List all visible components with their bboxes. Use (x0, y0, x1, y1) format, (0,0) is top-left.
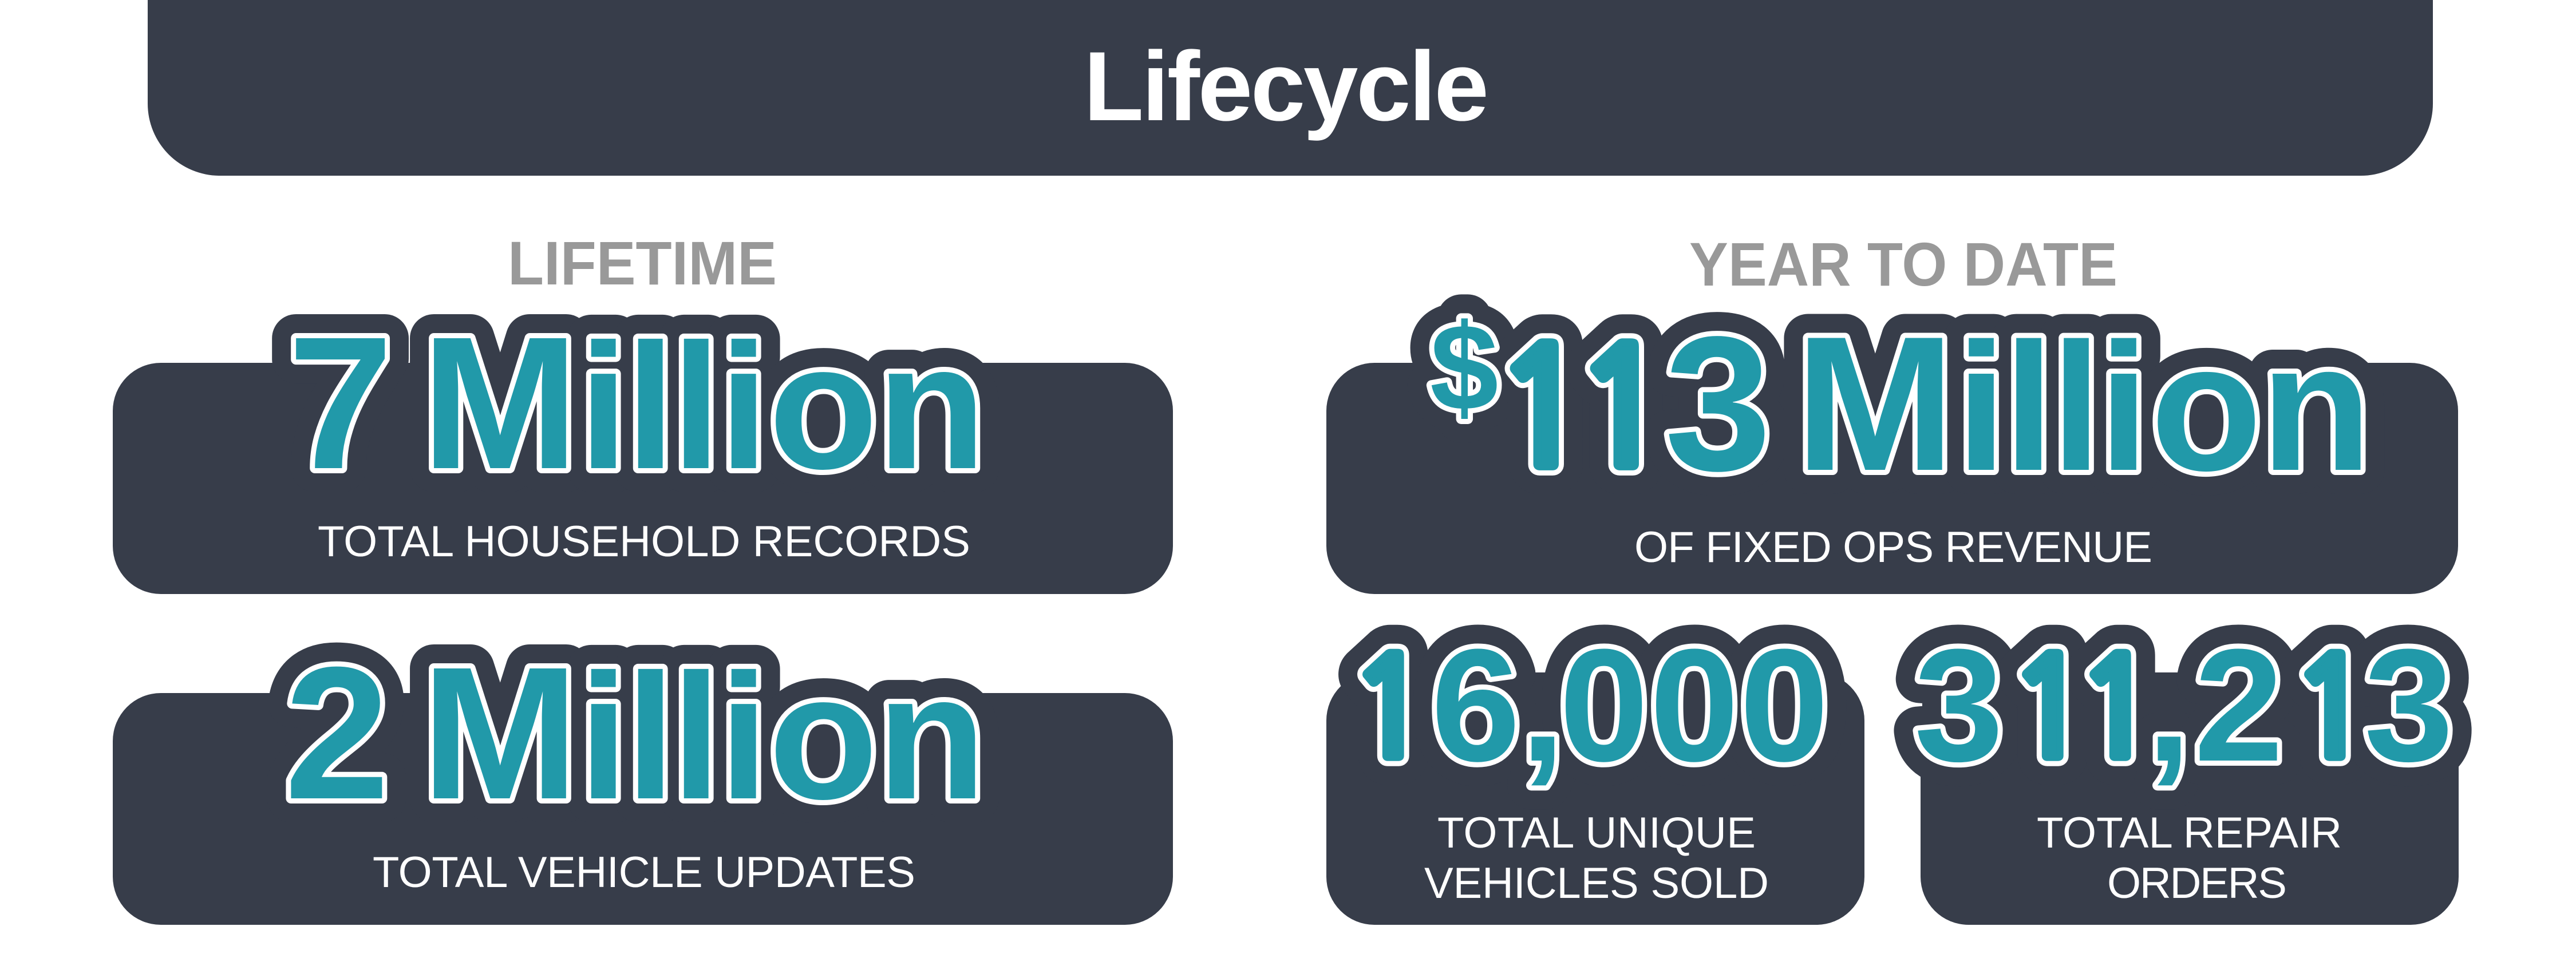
stat: 311,213: ,2 (2147, 616, 2283, 795)
stat: 311,213: 3 (2364, 616, 2453, 795)
stat: 113 million: illion (1956, 306, 2372, 509)
panel: total household records: 7 M (288, 297, 579, 508)
caption line 2: VEHICLES SOLD (1424, 859, 1769, 908)
panel: repair orders: 111 (2008, 641, 2374, 778)
stat: 311,213: 3 (1914, 616, 2004, 795)
panel: repair orders: 3 (2364, 616, 2453, 795)
stat: 2 million: 2 M (285, 627, 579, 838)
panel: total vehicle updates: 2 M (285, 627, 579, 838)
stat: 7 million: illion (579, 307, 986, 506)
caption line 2: ORDERS (2107, 859, 2287, 908)
title: Lifecycle (1084, 31, 1489, 141)
caption: TOTAL REPAIR (2037, 809, 2342, 857)
panel: fixed ops revenue: $ (1430, 298, 1499, 436)
panel: unique vehicles sold (1326, 616, 1864, 925)
panel: repair orders: 1 (2290, 641, 2374, 778)
panel: fixed ops revenue (1326, 296, 2458, 594)
stat: 2 million: illion (579, 638, 986, 837)
heading: lifetime: LIFETIME (508, 228, 777, 298)
panel: fixed ops revenue: 11 (1493, 329, 1672, 490)
stat: 113 million: 11 (1493, 329, 1672, 490)
panel: repair orders: ,2 (2147, 616, 2283, 795)
caption: TOTAL HOUSEHOLD RECORDS (318, 517, 970, 566)
stat: 16,000: 6,000 (1431, 616, 1829, 795)
panel: total vehicle updates: illion (579, 638, 986, 837)
stat: 7 million: 7 M (288, 297, 579, 508)
stat: dollar sign: $ (1430, 298, 1499, 436)
stat: 113 million: 3 M (1665, 296, 1955, 510)
panel: repair orders: 11 (2008, 641, 2159, 778)
panel: fixed ops revenue: 11 (1493, 329, 1672, 490)
panel: repair orders: 3 (1914, 616, 2004, 795)
stat: 311,213: 11 (2008, 641, 2159, 778)
caption: TOTAL VEHICLE UPDATES (373, 848, 915, 897)
panel: unique vehicles sold: 1 (1348, 641, 1432, 778)
panel: total vehicle updates (113, 627, 1173, 925)
panel: total household records: illion (579, 307, 986, 506)
heading: year to date: YEAR TO DATE (1689, 229, 2117, 299)
header banner (148, 0, 2433, 176)
stat: 311,213: 1 (2290, 641, 2374, 778)
panel: fixed ops revenue: 3 M (1665, 296, 1955, 510)
caption: TOTAL UNIQUE (1437, 809, 1756, 857)
panel: unique vehicles sold: 6,000 (1431, 616, 1829, 795)
caption: OF FIXED OPS REVENUE (1634, 523, 2152, 572)
stat: 16,000: 1 (1348, 641, 1432, 778)
panel: fixed ops revenue: illion (1956, 306, 2372, 509)
panel: total household records (113, 297, 1173, 594)
panel: unique vehicles sold: 1 (1348, 641, 1432, 778)
panel: repair orders (1914, 616, 2459, 925)
